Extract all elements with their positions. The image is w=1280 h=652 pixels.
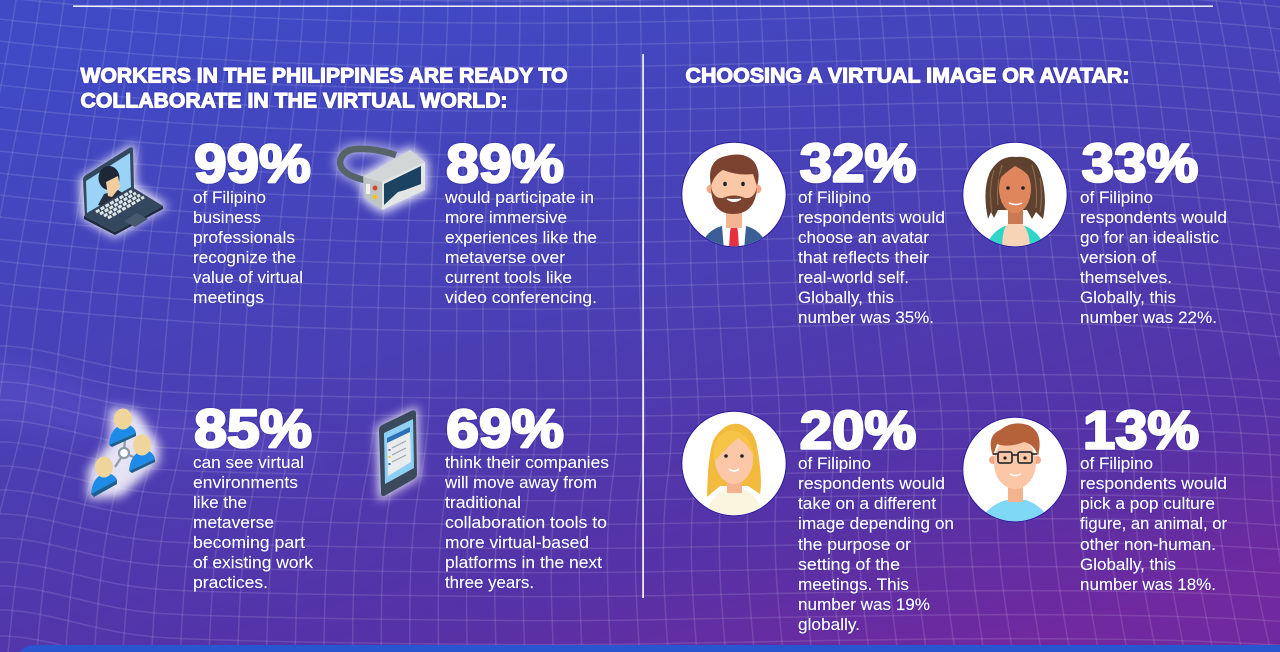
text: 20% description: the purpose or — [798, 536, 912, 554]
heading: workers ready to collaborate — [80, 64, 568, 112]
icon: tablet — [379, 410, 417, 497]
icon: laptop with person on screen — [83, 147, 163, 235]
text: 20% description: take on a different — [798, 495, 936, 513]
background light wave — [0, 360, 320, 470]
top rule — [73, 6, 1213, 7]
text: 20% description: of Filipino — [798, 455, 871, 473]
text: 69% description: more virtual-based — [445, 534, 589, 552]
text: 32% description: that reflects their — [798, 249, 930, 267]
heading: workers ready to collaborate: COLLABORATE IN THE VIRTUAL WORLD: — [80, 90, 507, 112]
text: 20% description: respondents would — [798, 475, 945, 493]
text: 13% description: figure, an animal, or — [1080, 515, 1228, 533]
stat: 99%: 99% — [194, 134, 311, 194]
text: 13% description: pick a pop culture — [1080, 495, 1215, 513]
text: 33% description: of Filipino — [1080, 189, 1153, 207]
stat: 32% — [798, 134, 945, 327]
text: 85% description: environments — [193, 474, 298, 492]
text: 33% description: Globally, this — [1080, 289, 1176, 307]
text: 20% description: number was 19% — [798, 596, 930, 614]
text: 33% description: version of — [1080, 249, 1156, 267]
text: 20% description: setting of the — [798, 556, 900, 574]
text: 99% description: of Filipino — [193, 189, 266, 207]
text: 20% description: image depending on — [798, 515, 954, 533]
stat: 89%: 89% — [446, 134, 564, 194]
stat: 20%: 20% — [800, 400, 916, 460]
text: 32% description: number was 35%. — [798, 309, 934, 327]
text: 32% description: choose an avatar — [798, 229, 930, 247]
text: 99% description: value of virtual — [193, 269, 303, 287]
text: 33% description: themselves. — [1080, 269, 1172, 287]
text: 69% description: platforms in the next — [445, 554, 602, 572]
text: 89% description: video conferencing. — [445, 289, 597, 307]
text: 69% description — [444, 454, 609, 592]
text: 99% description: professionals — [193, 229, 295, 247]
stat: 69%: 69% — [446, 399, 564, 459]
text: 20% description: meetings. This — [798, 576, 909, 594]
icon: connected people — [90, 408, 157, 497]
text: 89% description: metaverse over — [445, 249, 566, 267]
bottom blue band — [20, 645, 1280, 652]
text: 69% description: will move away from — [444, 474, 597, 492]
text: 13% description: other non-human. — [1080, 536, 1216, 554]
stat: 33%: 33% — [1082, 134, 1198, 194]
text: 85% description: metaverse — [193, 514, 274, 532]
text: 99% description — [193, 189, 303, 307]
text: 85% description: practices. — [193, 574, 268, 592]
avatar: bearded man — [682, 142, 786, 250]
text: 13% description: of Filipino — [1080, 455, 1153, 473]
stat: 13% — [1080, 400, 1228, 594]
stat: 85%: 85% — [194, 399, 312, 459]
stat: 99% — [193, 134, 311, 307]
text: 69% description: traditional — [445, 494, 521, 512]
text: 32% description: of Filipino — [798, 189, 871, 207]
text: 99% description: meetings — [193, 289, 264, 307]
avatar: blonde woman — [682, 411, 786, 520]
text: 33% description: number was 22%. — [1080, 309, 1217, 327]
text: 13% description — [1080, 455, 1228, 594]
heading: choosing an avatar: CHOOSING A VIRTUAL IMAGE OR AVATAR: — [686, 64, 1130, 88]
text: 85% description: becoming part — [193, 534, 305, 552]
text: 20% description — [798, 455, 954, 634]
text: 33% description: respondents would — [1080, 209, 1227, 227]
text: 13% description: respondents would — [1080, 475, 1227, 493]
stat: 33% — [1080, 134, 1227, 327]
text: 32% description: real-world self. — [798, 269, 909, 287]
text: 85% description — [193, 454, 314, 592]
heading: workers ready to collaborate: WORKERS IN THE PHILIPPINES ARE READY TO — [80, 64, 568, 88]
text: 89% description: current tools like — [445, 269, 572, 287]
text: 99% description: business — [193, 209, 261, 227]
stat: 69% — [444, 399, 609, 592]
text: 89% description: would participate in — [444, 189, 594, 207]
text: 69% description: three years. — [445, 574, 534, 592]
text: 99% description: recognize the — [193, 249, 296, 267]
text: 33% description: go for an idealistic — [1080, 229, 1219, 247]
text: 89% description: more immersive — [445, 209, 567, 227]
text: 32% description: Globally, this — [798, 289, 894, 307]
text: 33% description — [1080, 189, 1227, 327]
text: 69% description: think their companies — [445, 454, 609, 472]
text: 89% description: experiences like the — [445, 229, 597, 247]
text: 89% description — [444, 189, 597, 307]
text: 69% description: collaboration tools to — [445, 514, 607, 532]
text: 85% description: like the — [193, 494, 247, 512]
column divider — [642, 54, 644, 598]
text: 32% description — [798, 189, 945, 327]
avatar: woman with dark wavy hair — [963, 142, 1067, 250]
stat: 13%: 13% — [1083, 400, 1199, 460]
stat: 32%: 32% — [800, 134, 916, 194]
text: 13% description: number was 18%. — [1080, 576, 1216, 594]
text: 85% description: of existing work — [193, 554, 314, 572]
stat: 20% — [798, 400, 954, 634]
avatar: man with glasses — [963, 417, 1067, 525]
stat: 85% — [193, 399, 314, 592]
icon: VR headset — [340, 149, 425, 210]
text: 20% description: globally. — [798, 616, 860, 634]
stat: 89% — [444, 134, 597, 307]
text: 13% description: Globally, this — [1080, 556, 1176, 574]
text: 85% description: can see virtual — [193, 454, 304, 472]
text: 32% description: respondents would — [798, 209, 945, 227]
